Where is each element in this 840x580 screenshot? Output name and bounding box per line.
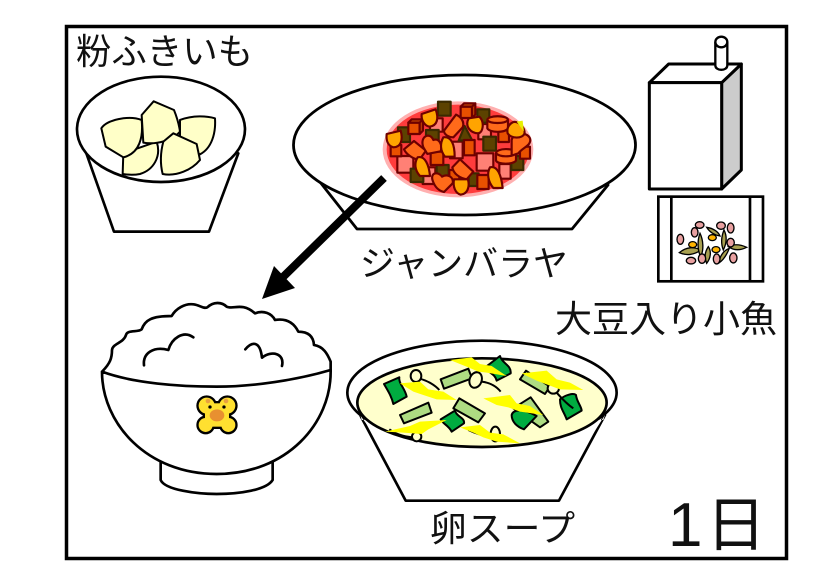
label: jambalaya: ジャンバラヤ [360,245,568,284]
bowl: egg soup [347,341,617,501]
label: soybeans with small fish: 大豆入り小魚 [555,299,777,340]
label: egg soup: 卵スープ [430,508,575,549]
arrow: to rice [262,178,384,299]
label: day 1: 1 [668,491,702,560]
drink carton [649,37,741,189]
food: jambalaya pieces [383,101,533,197]
egg streaks [385,357,583,443]
bear mark [199,398,235,432]
label: day 1: 日 [706,492,766,559]
package: soybeans with small fish [658,197,763,281]
label: steamed potatoes: 粉ふきいも [76,31,253,72]
rice bowl [102,303,331,494]
plate: jambalaya [294,75,636,229]
rice mound [103,303,331,387]
bowl: steamed potatoes [77,77,245,232]
foot [161,460,273,494]
label: day 1 [668,491,766,560]
outer frame [66,26,786,558]
straw [715,37,727,70]
bowl body [102,370,331,474]
soup ingredients [384,356,582,441]
